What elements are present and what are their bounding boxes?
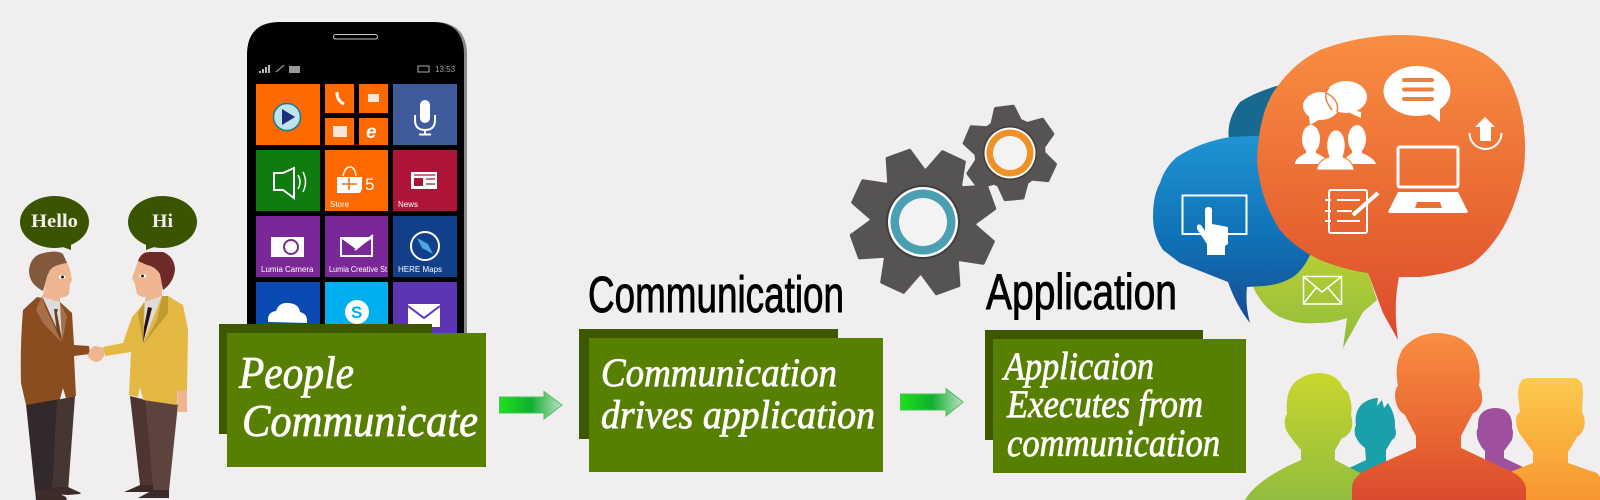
silhouette: yellow person — [1510, 378, 1600, 500]
tile: phone — [325, 84, 354, 113]
icon: three people — [1295, 125, 1376, 170]
panel: people communicate: Communicate — [242, 396, 478, 446]
speech bubble: Hello — [20, 196, 89, 250]
tile: store: 5 — [365, 175, 374, 194]
panel: people communicate: People — [238, 348, 354, 398]
icon: upload arrow — [1470, 117, 1502, 149]
tile: microphone — [393, 84, 457, 145]
silhouette: teal person — [1345, 398, 1400, 490]
panel: application executes from communication: Applicaion — [1001, 345, 1154, 388]
tile: skype: S — [351, 303, 362, 322]
tile: lumia camera — [256, 216, 320, 277]
tile: news: News — [398, 200, 418, 209]
tile: store — [325, 150, 388, 211]
illustration: two men shaking hands — [21, 252, 188, 500]
arrow: people to communication — [500, 392, 562, 419]
speech bubbles cluster — [1153, 35, 1525, 348]
speech bubble: Hi — [128, 196, 197, 250]
tile: outlook — [325, 118, 354, 145]
tile: here maps: HERE Maps — [398, 265, 442, 274]
tile: lumia creative studio — [325, 216, 388, 277]
heading: application: Application — [986, 264, 1177, 320]
tile: lumia creative studio: Lumia Creative St — [329, 265, 388, 274]
panel: people communicate — [219, 324, 486, 467]
tile: internet explorer: e — [366, 122, 377, 143]
smartphone — [247, 22, 467, 345]
heading: communication: Communication — [588, 266, 844, 323]
panel: communication drives application: Communication — [601, 350, 837, 395]
tile: speaker — [256, 150, 320, 211]
audience silhouettes — [1245, 333, 1600, 500]
tile: skype — [325, 282, 388, 334]
panel: communication drives application — [579, 329, 883, 472]
bubble: blue with touch tablet — [1153, 135, 1320, 323]
panel: application executes from communication: communication — [1007, 422, 1220, 465]
panel: application executes from communication — [985, 330, 1246, 473]
icon: overlapping chat bubbles — [1303, 81, 1367, 125]
tile: internet explorer — [359, 118, 388, 145]
icon: chat bubble with lines — [1384, 66, 1450, 122]
speech bubble: Hello: Hello — [31, 211, 78, 232]
bubble: large orange — [1257, 35, 1525, 340]
icon: notepad and pencil — [1325, 190, 1378, 233]
tile: lumia camera: Lumia Camera — [261, 265, 314, 274]
handshake — [88, 346, 104, 362]
speech bubble: Hi: Hi — [152, 211, 173, 232]
silhouette: orange person — [1352, 333, 1526, 500]
silhouette: purple person — [1477, 408, 1525, 485]
tile: video — [256, 84, 320, 145]
right man — [103, 252, 188, 498]
icon: laptop — [1388, 147, 1468, 213]
tile: store: Store — [330, 200, 350, 209]
status bar — [259, 65, 456, 74]
tile: news — [393, 150, 457, 211]
arrow: communication to application — [900, 388, 963, 416]
bubble: dark teal — [1228, 85, 1290, 140]
tile: messaging — [359, 84, 388, 113]
status bar: 13:53 — [435, 65, 456, 74]
panel: communication drives application: drives application — [601, 392, 875, 437]
tile: here maps — [393, 216, 457, 277]
left man — [21, 252, 90, 500]
icon: large gear — [849, 148, 997, 296]
tile: onedrive — [256, 282, 320, 334]
silhouette: green person — [1245, 373, 1370, 500]
bubble: green with envelope — [1250, 250, 1377, 348]
panel: application executes from communication: Executes from — [1006, 383, 1203, 426]
icon: small gear — [962, 106, 1058, 200]
tile: mail — [393, 282, 457, 334]
